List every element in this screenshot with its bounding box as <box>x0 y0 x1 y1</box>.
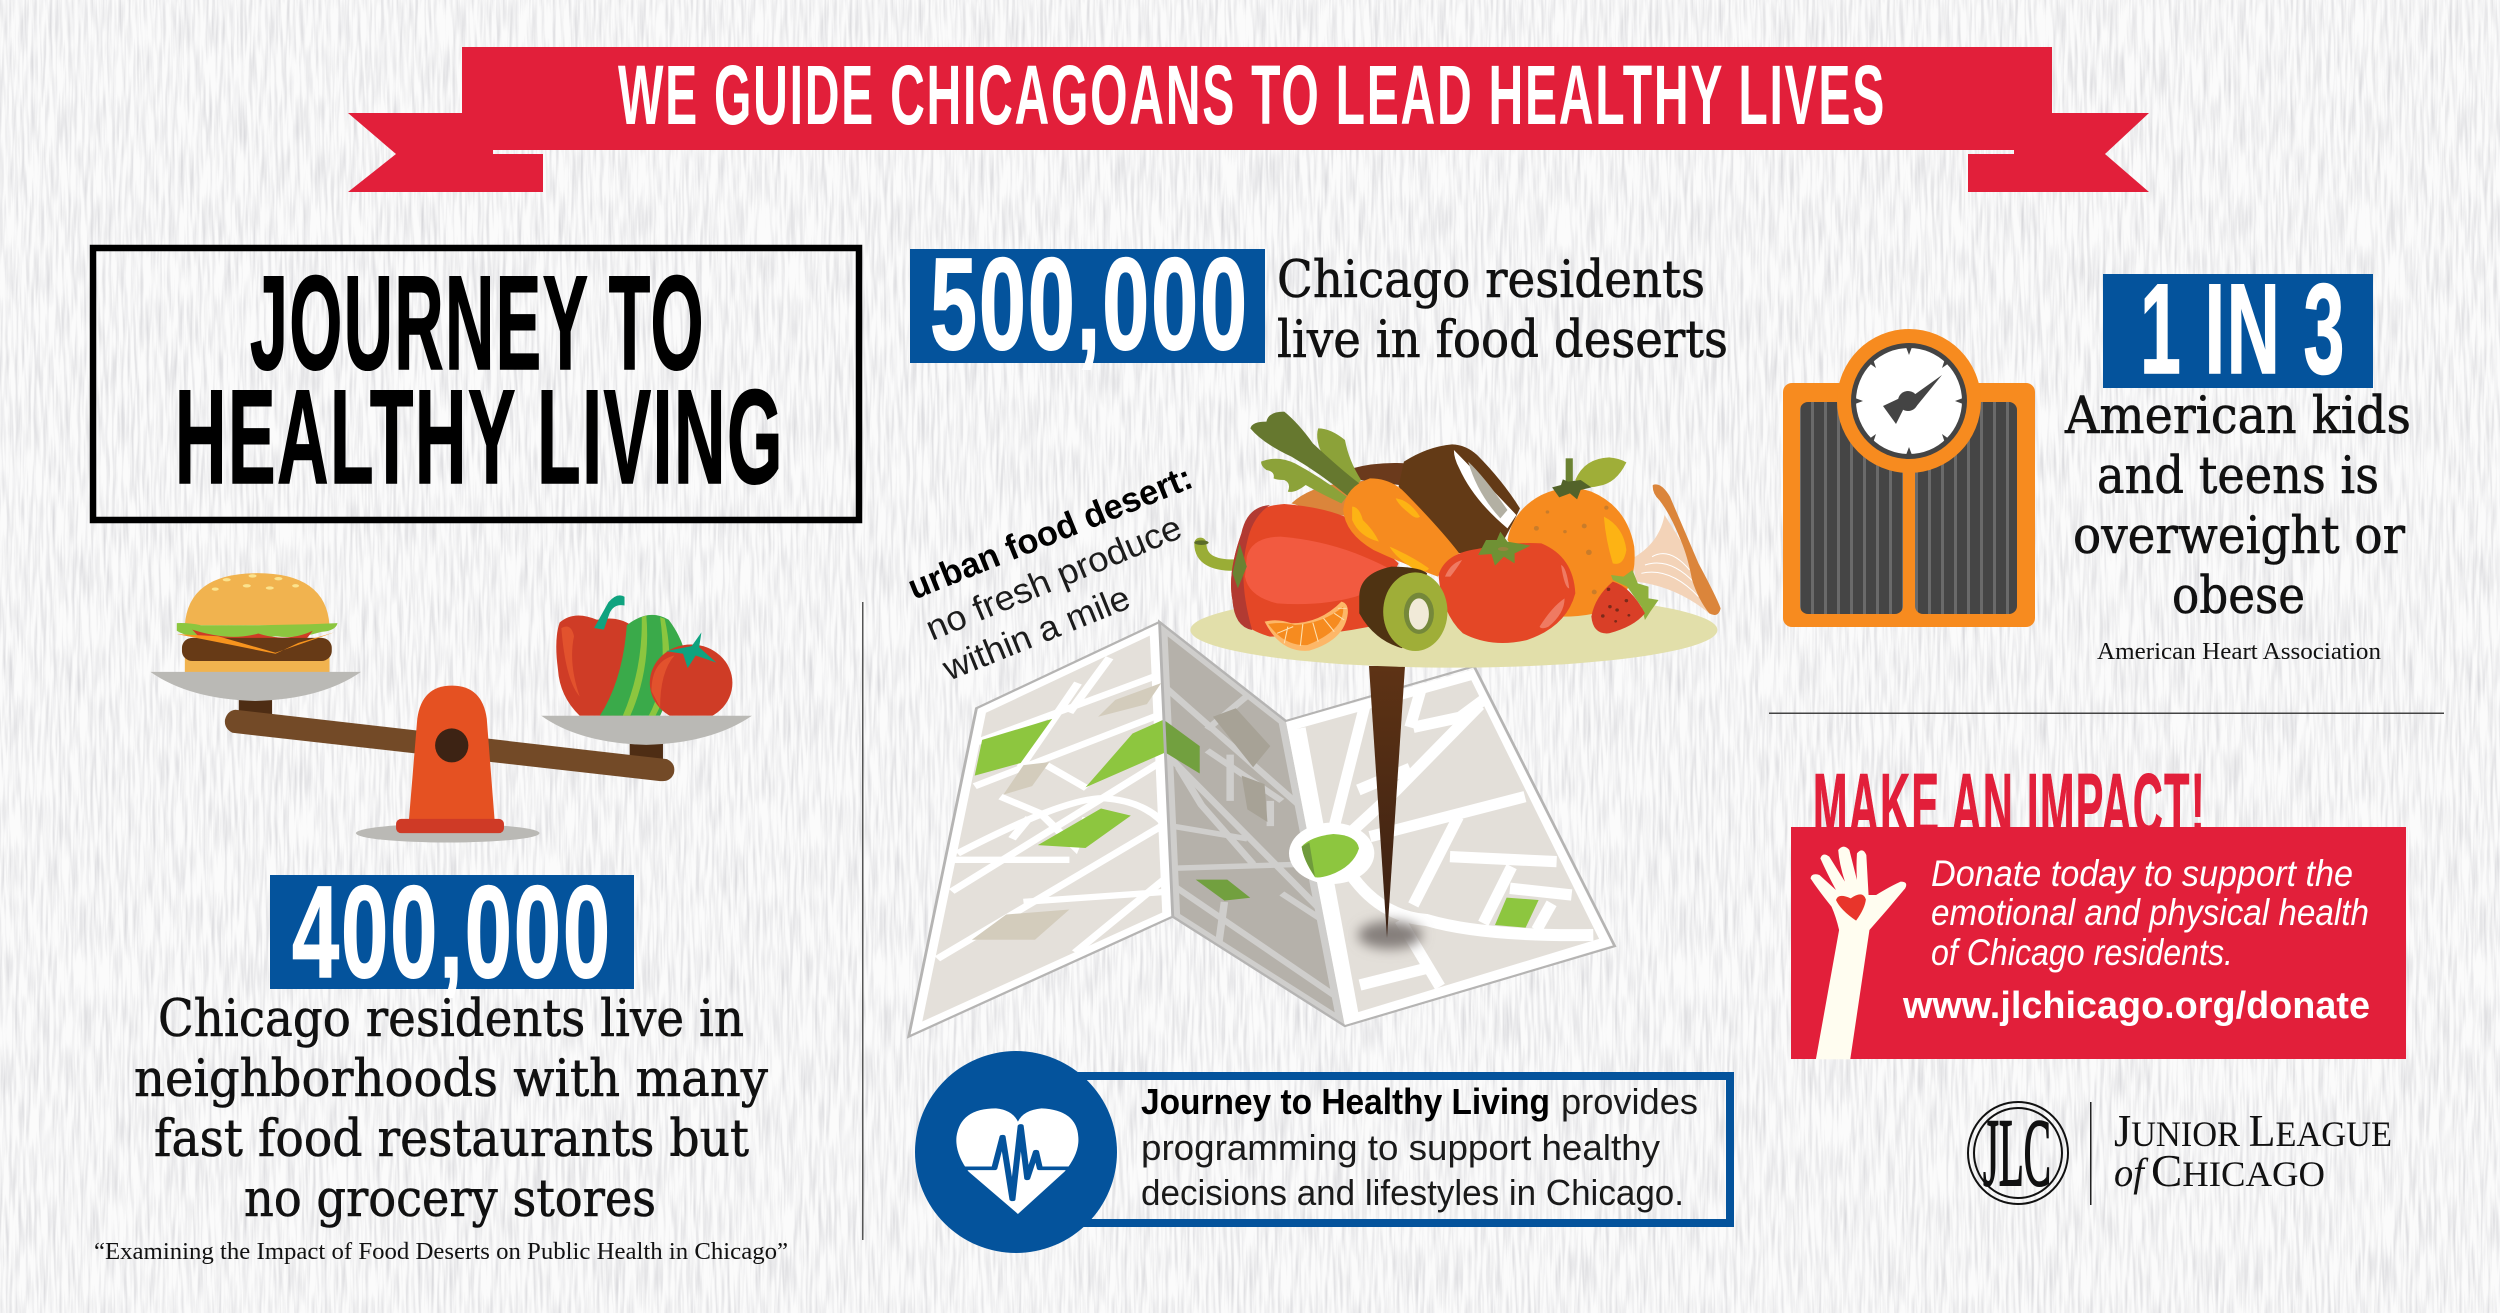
annotation: urban food desert definition: within a mile <box>936 578 1136 689</box>
donate text: of Chicago residents. <box>1931 932 2233 973</box>
text block: 1 in 3 description: American kids <box>2064 387 2411 446</box>
citation: american heart association: American Heart Association <box>2097 639 2381 665</box>
text block: 400,000 description: fast food restaurants but <box>154 1110 749 1169</box>
panel: make an impact <box>1791 755 2406 1059</box>
logo wordmark <box>2114 1105 2392 1196</box>
map pin shadow <box>1358 921 1422 949</box>
logo wordmark: of <box>2114 1150 2149 1195</box>
icon: orange slice <box>1265 602 1348 651</box>
illustration: map pin <box>1369 666 1405 938</box>
callout text: decisions and lifestyles in Chicago. <box>1141 1172 1684 1213</box>
illustration: folded street map <box>909 622 1615 1037</box>
icon: mushroom <box>1632 484 1721 615</box>
annotation: urban food desert definition <box>902 458 1198 689</box>
icon: coconut <box>1399 444 1520 553</box>
icon: bathroom scale <box>1783 329 2035 627</box>
banner ribbon <box>348 47 2149 192</box>
icon: orange <box>1507 457 1635 617</box>
donate text <box>1931 853 2369 973</box>
stat: 500,000: 500,000 <box>930 230 1249 377</box>
map left panel <box>909 622 1173 1037</box>
stat: 400,000: 400,000 <box>292 858 612 1005</box>
text block: 1 in 3 description: and teens is <box>2097 447 2379 506</box>
icon: vegetables <box>556 595 732 721</box>
donate url: www.jlchicago.org/donate <box>1902 985 2370 1027</box>
illustration: balance scale with burger and vegetables <box>150 573 752 842</box>
callout text <box>1141 1081 1698 1213</box>
icon: kiwi <box>1359 567 1447 651</box>
annotation: urban food desert definition: urban food desert: <box>902 458 1198 607</box>
callout text: Journey to Healthy Living <box>1141 1081 1550 1122</box>
logo wordmark: CHICAGO <box>2151 1145 2325 1196</box>
icon: strawberry <box>1591 570 1659 633</box>
icon: tomato <box>1439 532 1575 643</box>
icon: bell pepper <box>1194 504 1399 637</box>
stat: 1 in 3 <box>2103 258 2373 401</box>
panel: journey title box <box>93 248 859 520</box>
callout text: provides <box>1561 1081 1698 1122</box>
heading: journey to healthy living: HEALTHY LIVING <box>175 363 784 512</box>
map right panel <box>1286 668 1613 1027</box>
logo emblem: JLC <box>1983 1099 2051 1206</box>
icon: carrot greens <box>1250 412 1361 503</box>
heading: journey to healthy living: JOURNEY TO <box>250 249 705 398</box>
text block: 500,000 description: Chicago residents <box>1277 251 1705 310</box>
citation: food deserts study: “Examining the Impact of Food Deserts on Public Health in Chicago” <box>94 1239 788 1265</box>
icon: hand with heart <box>1811 847 1906 1059</box>
map outline <box>909 622 1615 1037</box>
text block: 500,000 description <box>1277 251 1728 370</box>
logo: junior league of chicago <box>1968 1099 2392 1206</box>
text block: 400,000 description: no grocery stores <box>244 1170 656 1229</box>
plate <box>1190 592 1717 668</box>
text block: 400,000 description <box>134 990 768 1229</box>
donate text: emotional and physical health <box>1931 892 2369 933</box>
icon: burger <box>177 573 338 674</box>
text block: 1 in 3 description: overweight or <box>2073 507 2406 566</box>
donate text: Donate today to support the <box>1931 853 2353 894</box>
callout text: programming to support healthy <box>1141 1127 1660 1168</box>
stat: 400,000 <box>270 858 634 1005</box>
logo wordmark: JUNIOR LEAGUE <box>2114 1105 2392 1156</box>
text block: 1 in 3 description: obese <box>2172 567 2305 626</box>
logo emblem <box>1968 1099 2068 1206</box>
stat: 1 in 3: 1 IN 3 <box>2140 258 2346 401</box>
map middle fold <box>1160 622 1345 1026</box>
callout: journey to healthy living program <box>915 1051 1730 1253</box>
icon: carrot <box>1343 478 1459 577</box>
illustration: plate of fresh produce <box>1190 412 1721 668</box>
callout frame <box>1079 1076 1730 1223</box>
heading: journey to healthy living <box>175 249 784 512</box>
icon: heart with pulse <box>915 1051 1117 1253</box>
stat: 500,000 <box>910 230 1265 377</box>
text block: 400,000 description: Chicago residents live in <box>158 990 744 1049</box>
text block: 400,000 description: neighborhoods with many <box>134 1050 768 1109</box>
annotation: urban food desert definition: no fresh produce <box>920 508 1187 648</box>
text block: 1 in 3 description <box>2064 387 2411 626</box>
text block: 500,000 description: live in food deserts <box>1277 311 1728 370</box>
